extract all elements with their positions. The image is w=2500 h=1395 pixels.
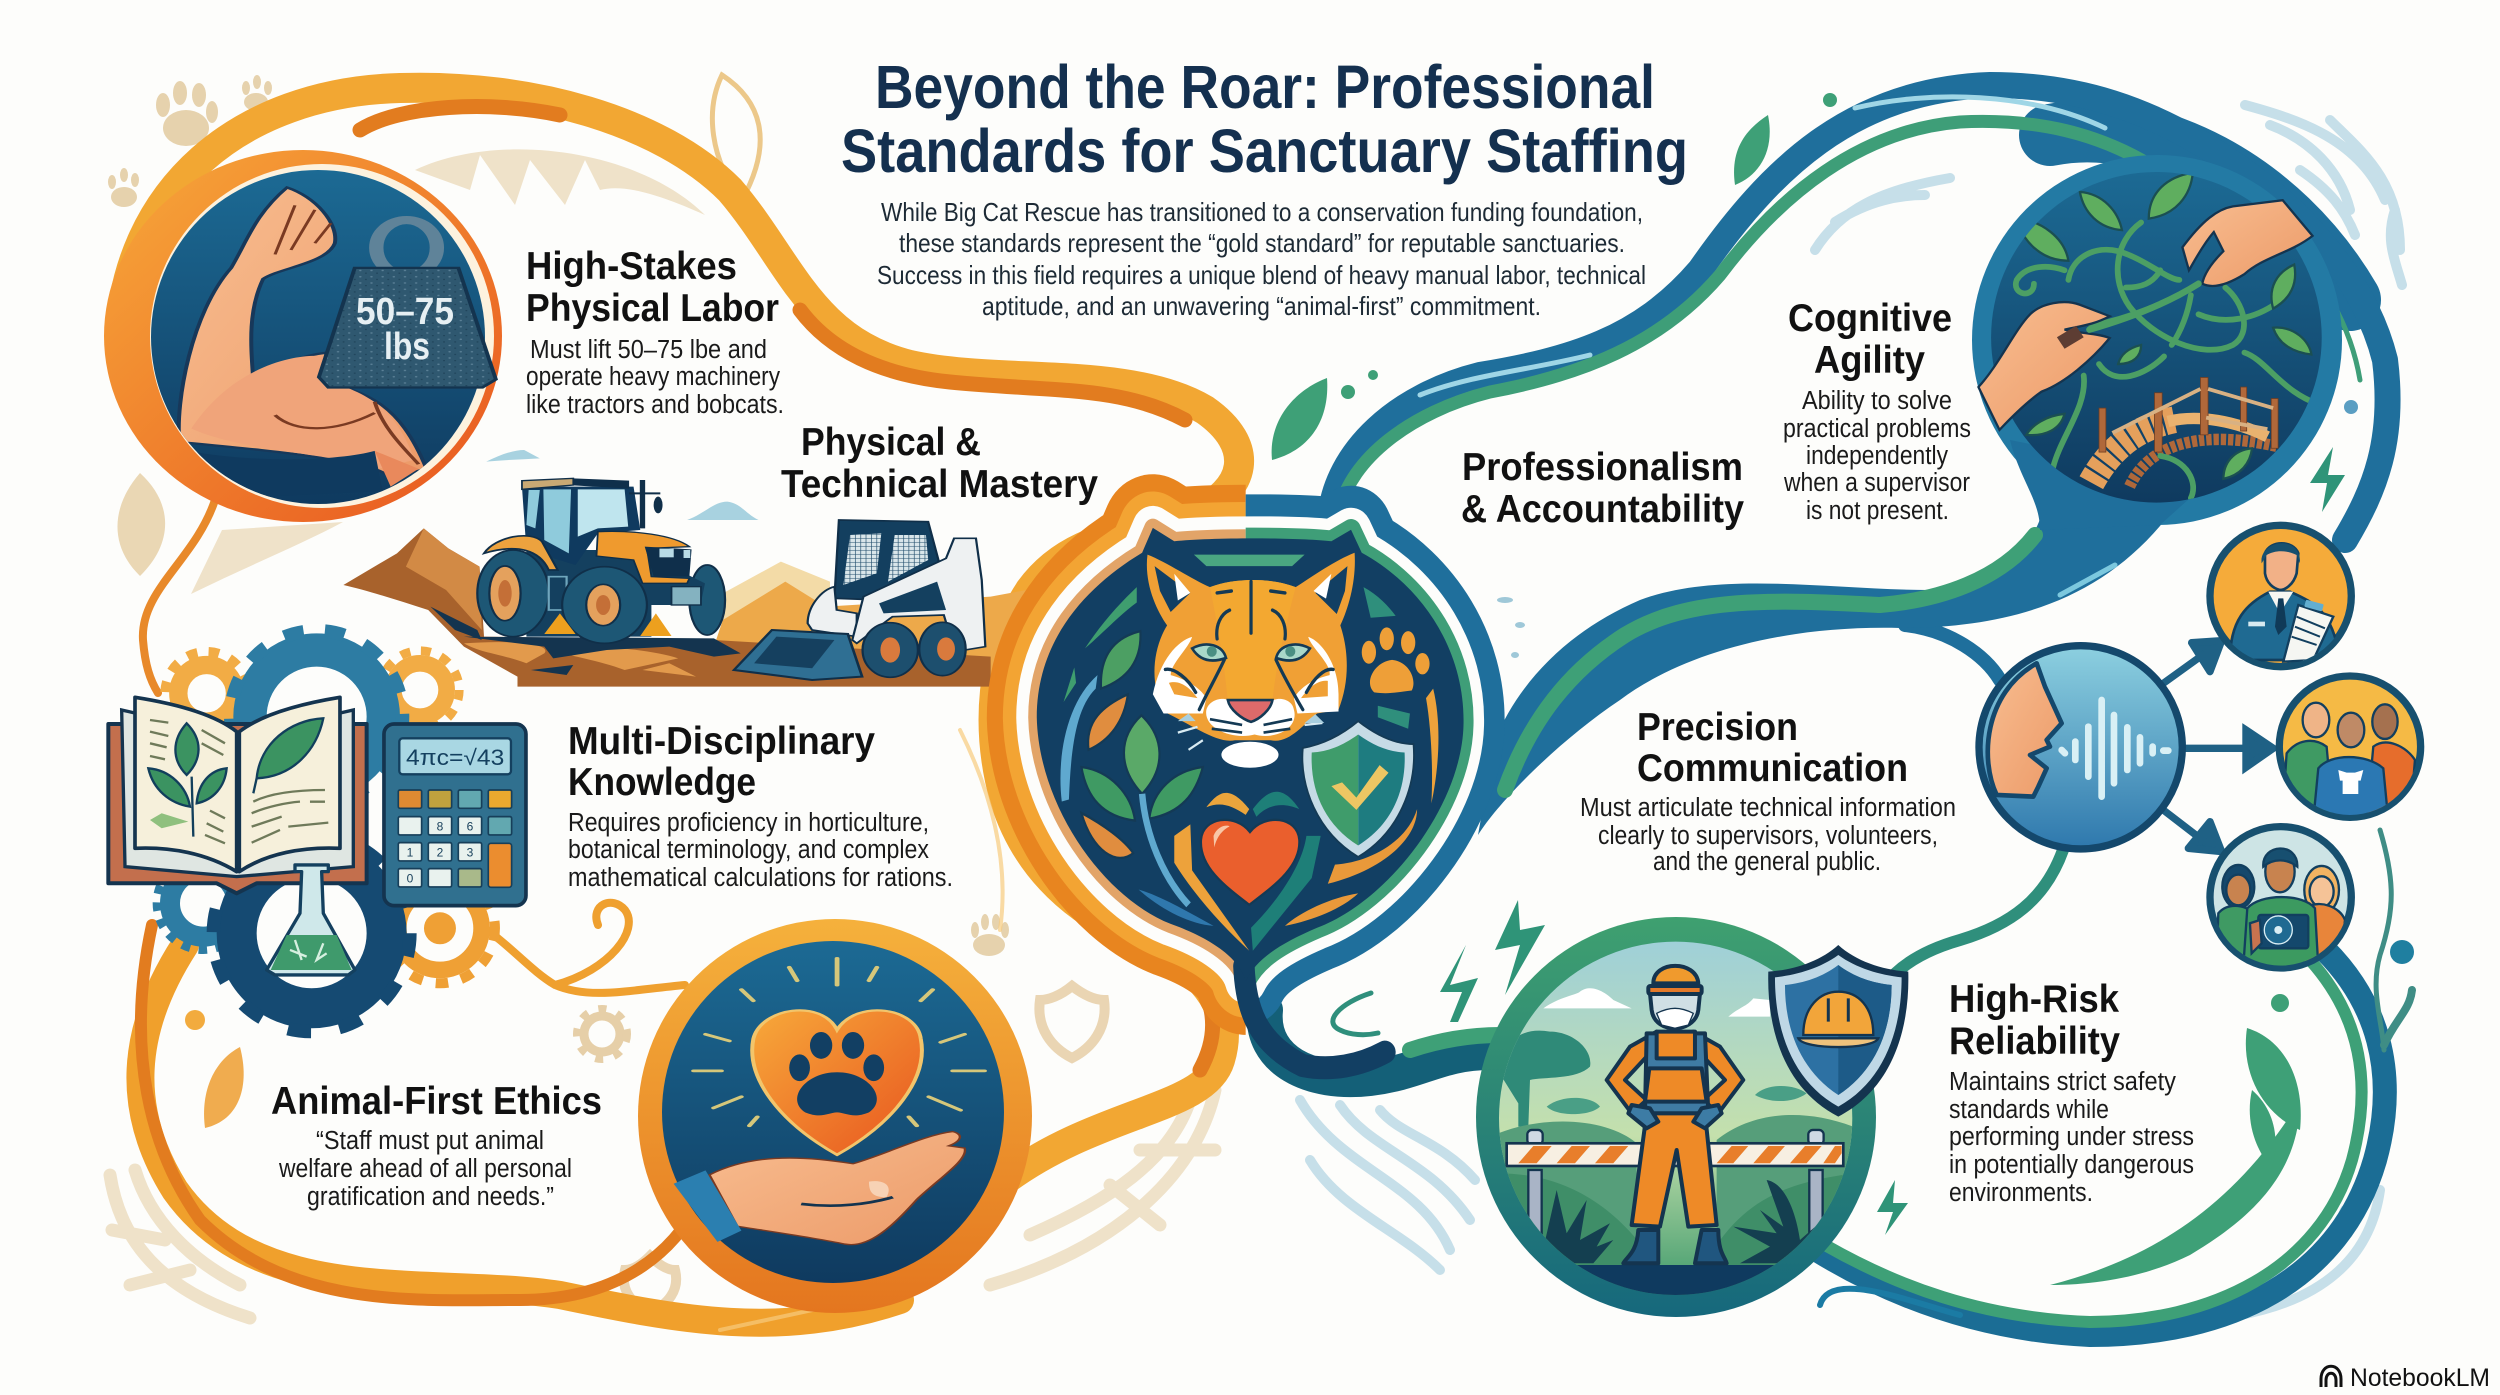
face profile	[1988, 663, 2062, 797]
text: multi-disciplinary knowledge: Requires proficiency in horticulture,	[568, 809, 929, 837]
panel: central big cat emblem	[1037, 528, 1464, 1068]
green strands on tail	[1505, 535, 2115, 790]
decorative light blue swirls	[1300, 105, 2402, 1315]
calculator	[384, 724, 526, 906]
icon: tan gear	[577, 1009, 627, 1059]
intro paragraph: aptitude, and an unwavering “animal-first” commitment.	[982, 291, 1541, 321]
heading: professionalism and accountability	[1461, 446, 1744, 531]
text: cognitive agility: practical problems	[1783, 415, 1971, 443]
plant stem	[2376, 830, 2391, 1050]
text: high-risk reliability: Reliability	[1949, 1020, 2120, 1063]
hard hat	[1803, 992, 1873, 1035]
illustration: gears book calculator flask: 1	[407, 846, 414, 860]
cheeks	[1153, 637, 1339, 713]
illustration: tractor and skid-steer	[343, 450, 1026, 687]
clouds	[486, 450, 759, 520]
text: high-risk reliability	[1949, 978, 2194, 1207]
illustration: gears book calculator flask: 4πc=√43	[406, 745, 504, 770]
heart circle ring	[638, 919, 1032, 1313]
cab	[522, 487, 640, 565]
decorative tan swirls	[191, 149, 705, 594]
right hand	[2182, 200, 2313, 286]
bridge	[2091, 420, 2176, 483]
text: animal-first ethics	[271, 1080, 602, 1211]
boots	[1623, 1230, 1727, 1263]
curl in pocket under emblem	[1333, 993, 1378, 1035]
arrow to supervisor	[2163, 641, 2222, 683]
title	[841, 53, 1688, 185]
book cover	[108, 724, 367, 893]
torso	[1645, 1033, 1708, 1113]
arrow to volunteers	[2185, 730, 2273, 767]
curl line from heart ring to gear	[480, 903, 685, 993]
connector from emblem tip to lower ribbon	[1244, 966, 1385, 1068]
emblem leaves	[1081, 631, 1214, 926]
icon: weight	[319, 220, 496, 387]
cones	[544, 613, 671, 636]
emblem outline right	[1246, 486, 1505, 1026]
text: multi-disciplinary knowledge: botanical terminology, and complex	[568, 836, 929, 864]
wheels	[863, 623, 918, 677]
calculator screen	[399, 738, 511, 774]
paw	[789, 1032, 884, 1115]
panel: vines and bridge circle	[1972, 155, 2342, 530]
text: cognitive agility: is not present.	[1806, 497, 1949, 525]
heart	[752, 1010, 922, 1155]
text: high-risk reliability: in potentially dangerous	[1949, 1151, 2194, 1179]
illustration: gears book calculator flask	[108, 631, 526, 1032]
ground	[1577, 1265, 1774, 1295]
book plant	[148, 718, 323, 837]
illustration: gears book calculator flask: 3	[467, 846, 474, 860]
heart circle background	[662, 941, 1004, 1283]
tractor	[477, 478, 725, 643]
eyes	[1192, 644, 1310, 661]
icon: safety shield with hard hat	[1768, 945, 1908, 1117]
panel: physical labor circle	[104, 150, 502, 522]
chassis behind wheels	[526, 550, 651, 637]
ground	[343, 528, 991, 687]
open hand	[710, 1132, 965, 1245]
fender	[484, 536, 558, 570]
emblem outline left	[986, 474, 1246, 1035]
front wheel	[562, 567, 647, 643]
text: animal-first ethics: welfare ahead of all personal	[278, 1155, 572, 1183]
text: precision communication: clearly to supervisors, volunteers,	[1598, 822, 1938, 850]
text: high-risk reliability: standards while	[1949, 1096, 2109, 1124]
speech bubble circle	[1979, 646, 2182, 849]
public with camera circle	[2210, 827, 2351, 968]
intro paragraph: these standards represent the “gold standard” for reputable sanctuaries.	[899, 228, 1625, 258]
icon: flexed arm	[179, 187, 427, 500]
text: cognitive agility: Cognitive	[1788, 297, 1952, 340]
thin accents	[720, 730, 1003, 1330]
calculator keys	[398, 790, 512, 887]
arrow to public	[2163, 810, 2222, 852]
text: multi-disciplinary knowledge: Multi-Disciplinary	[568, 720, 875, 763]
text: high-stakes physical labor: Must lift 50–75 lbe and	[530, 336, 767, 364]
lower tail from vines circle	[1478, 480, 2165, 835]
gears	[157, 631, 495, 1032]
rear wheel	[477, 550, 549, 637]
text: high-risk reliability: Maintains strict safety	[1949, 1068, 2176, 1096]
text: precision communication: Precision	[1637, 706, 1798, 749]
intro paragraph: While Big Cat Rescue has transitioned to a conservation funding foundation,	[881, 197, 1643, 227]
gloves	[1628, 1105, 1722, 1128]
skid-steer	[734, 520, 985, 680]
panel: animal first ethics circle	[638, 919, 1032, 1313]
vines ring	[1972, 155, 2342, 525]
far front wheel	[689, 565, 725, 635]
barrier	[1507, 1130, 1843, 1233]
right blue flowing ribbon	[1330, 85, 2388, 985]
worker circle ring	[1476, 917, 1876, 1317]
intro paragraph: Success in this field requires a unique blend of heavy manual labor, technical	[877, 260, 1646, 290]
lower right ribbon	[1265, 830, 2412, 1335]
striped tan corners	[110, 1090, 1215, 1318]
illustration: gears book calculator flask: 2	[437, 846, 444, 860]
text: cognitive agility: when a supervisor	[1783, 469, 1970, 497]
text: high-stakes physical labor: like tractors and bobcats.	[526, 391, 784, 419]
droplets right of cat	[1497, 597, 1525, 658]
intro paragraph	[877, 197, 1646, 321]
face markings	[1165, 581, 1333, 710]
emblem shield	[1302, 721, 1414, 857]
heading: physical and technical mastery	[781, 421, 1098, 506]
text: high-stakes physical labor: Physical Labor	[526, 287, 779, 330]
text: precision communication	[1580, 706, 1956, 876]
thick tail connector	[2010, 440, 2210, 530]
arms	[1607, 1032, 1743, 1113]
loader bucket	[734, 630, 862, 680]
hills	[1500, 1115, 1852, 1239]
worker figure	[1607, 966, 1743, 1263]
volunteers circle	[2279, 676, 2421, 820]
text: animal-first ethics: “Staff must put animal	[316, 1127, 544, 1155]
text: precision communication: Must articulate technical information	[1580, 794, 1956, 822]
text: cognitive agility: independently	[1806, 442, 1948, 470]
book text lines	[150, 720, 328, 843]
circle background	[151, 170, 485, 504]
title: Beyond the Roar: Professional	[875, 53, 1655, 121]
worker circle background	[1499, 942, 1852, 1295]
text: animal-first ethics: Animal-First Ethics	[271, 1080, 602, 1123]
icon: tan shields	[624, 986, 1105, 1312]
NotebookLM logo: NotebookLM	[2350, 1364, 2490, 1392]
cat face	[1147, 553, 1355, 768]
clouds	[1543, 988, 1770, 1017]
text: multi-disciplinary knowledge: mathematical calculations for rations.	[568, 864, 953, 892]
title: Standards for Sanctuary Staffing	[841, 117, 1688, 185]
tangled vines	[2016, 222, 2325, 498]
emblem paw	[1362, 627, 1430, 693]
weight label	[356, 291, 454, 368]
icon: tan leaf left	[117, 473, 165, 576]
text: high-risk reliability: High-Risk	[1949, 978, 2119, 1021]
text: high-stakes physical labor	[526, 245, 784, 419]
icon: tan leaf outlines	[712, 75, 760, 200]
panel: high risk reliability worker circle	[1476, 917, 1876, 1317]
illustration: gears book calculator flask: 0	[407, 872, 414, 886]
trees	[1500, 1031, 1590, 1127]
legs	[1632, 1113, 1717, 1227]
left orange flowing ribbon	[120, 88, 1239, 1330]
text: cognitive agility: Agility	[1814, 339, 1925, 382]
text: precision communication: Communication	[1637, 747, 1908, 790]
circle ring	[104, 150, 502, 522]
weight label: lbs	[384, 326, 430, 368]
text: cognitive agility	[1783, 297, 1971, 525]
supervisor circle	[2210, 525, 2351, 667]
icon: green plant leaves and dots	[1272, 93, 2414, 1168]
text: high-stakes physical labor: High-Stakes	[526, 245, 737, 288]
mountains	[723, 562, 830, 623]
heading: professionalism and accountability: Professionalism	[1462, 446, 1743, 489]
head and helmet	[1650, 993, 1700, 1028]
text: multi-disciplinary knowledge: Knowledge	[568, 761, 756, 804]
left hand	[1978, 302, 2110, 430]
text: cognitive agility: Ability to solve	[1802, 387, 1952, 415]
text: high-stakes physical labor: operate heavy machinery	[526, 363, 780, 391]
panel: precision communication speech circle	[1979, 525, 2421, 968]
heading: professionalism and accountability: & Accountability	[1461, 488, 1744, 531]
icon: lightning bolts	[1440, 447, 2345, 1235]
emblem body	[1037, 528, 1464, 981]
vine leaves	[2017, 173, 2311, 479]
vines circle background	[1991, 172, 2322, 503]
icon: orange leaf lower left	[204, 1047, 244, 1128]
illustration: gears book calculator flask: 6	[467, 820, 474, 834]
icon: tan paw prints top left	[108, 75, 1009, 956]
weight label: 50–75	[356, 291, 454, 333]
sound wave	[2062, 700, 2168, 797]
green vine from speech bubble to shield	[1885, 850, 2063, 985]
decorative emblem arcs	[1060, 555, 1438, 803]
emblem gears and heart	[1174, 792, 1321, 951]
text: multi-disciplinary knowledge	[568, 720, 953, 892]
rays	[694, 958, 985, 1126]
illustration: gears book calculator flask: 8	[437, 820, 444, 834]
text: high-risk reliability: environments.	[1949, 1179, 2093, 1207]
text: high-risk reliability: performing under stress	[1949, 1123, 2194, 1151]
flask	[267, 865, 355, 975]
heading: physical and technical mastery: Technical Mastery	[781, 463, 1098, 506]
emblem orange accents	[1285, 809, 1417, 926]
heading: physical and technical mastery: Physical &	[801, 421, 981, 464]
muzzle	[1206, 699, 1295, 736]
body	[571, 557, 705, 623]
grass	[1540, 1180, 1827, 1263]
text: animal-first ethics: gratification and needs.”	[307, 1183, 554, 1211]
text: precision communication: and the general public.	[1653, 848, 1881, 876]
book pages	[135, 697, 237, 872]
